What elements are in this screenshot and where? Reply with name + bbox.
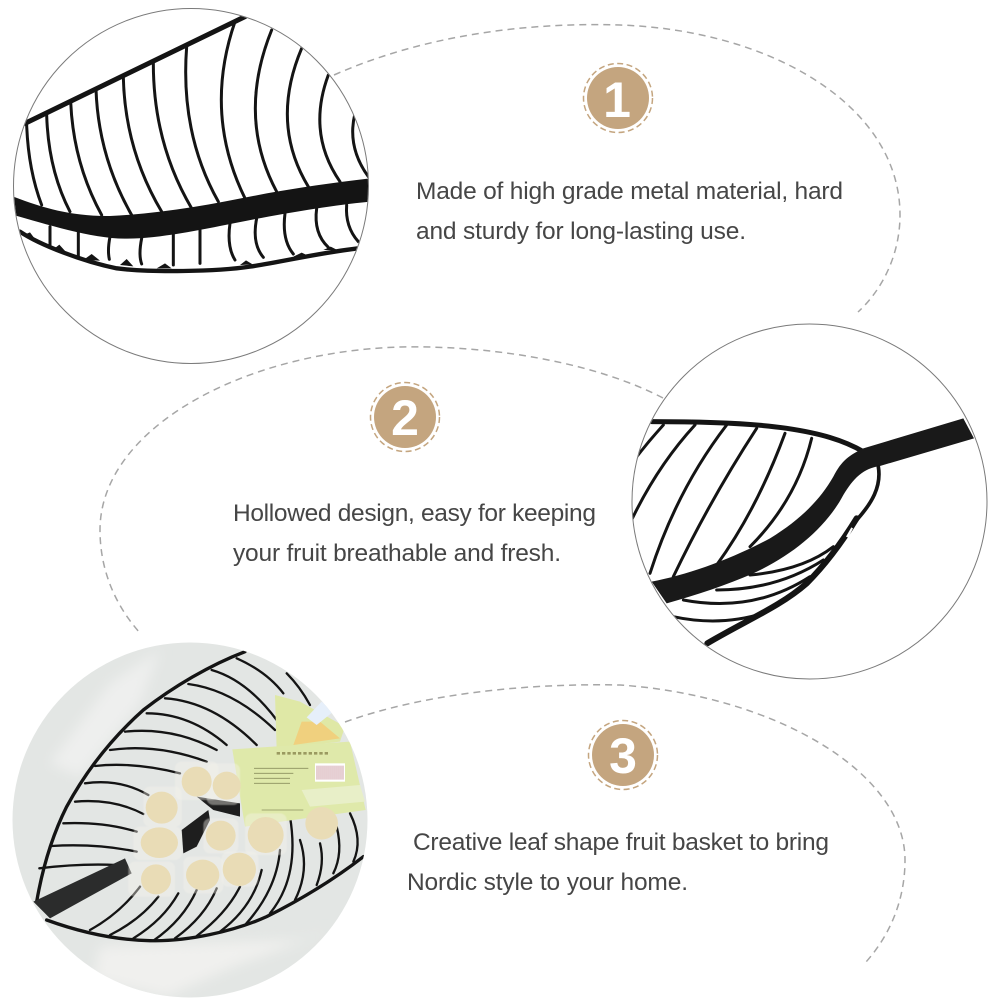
panel: basket rim close-up photo circle: [13, 8, 370, 364]
text block: feature 2: [233, 500, 596, 567]
dashed connector arc 3: [345, 685, 905, 962]
text block: feature 2: Hollowed design, easy for keeping: [233, 500, 596, 527]
text block: feature 3: [407, 829, 829, 896]
number badge 2: 2: [391, 390, 419, 446]
number badge 3: 3: [609, 728, 637, 784]
number badge 3: [588, 720, 658, 790]
text block: feature 2: your fruit breathable and fresh.: [233, 540, 561, 567]
dashed connector arc 1: [334, 25, 900, 312]
panel: basket stem close-up photo circle: [630, 324, 987, 679]
number badge 1: [584, 64, 652, 132]
text block: feature 1: Made of high grade metal material, hard: [416, 178, 843, 205]
number badge 2: [370, 382, 440, 452]
wrapped candy balls: [128, 762, 338, 897]
text block: feature 3: Creative leaf shape fruit basket to bring: [413, 829, 829, 856]
dashed connector arc 2: [100, 347, 663, 633]
panel: top-view basket with snacks photo circle: [12, 642, 368, 998]
snack package large: [232, 742, 366, 827]
text block: feature 3: Nordic style to your home.: [407, 869, 688, 896]
snack package small: [275, 695, 345, 749]
text block: feature 1: [416, 178, 843, 245]
text block: feature 1: and sturdy for long-lasting use.: [416, 218, 746, 245]
number badge 1: 1: [603, 72, 631, 128]
